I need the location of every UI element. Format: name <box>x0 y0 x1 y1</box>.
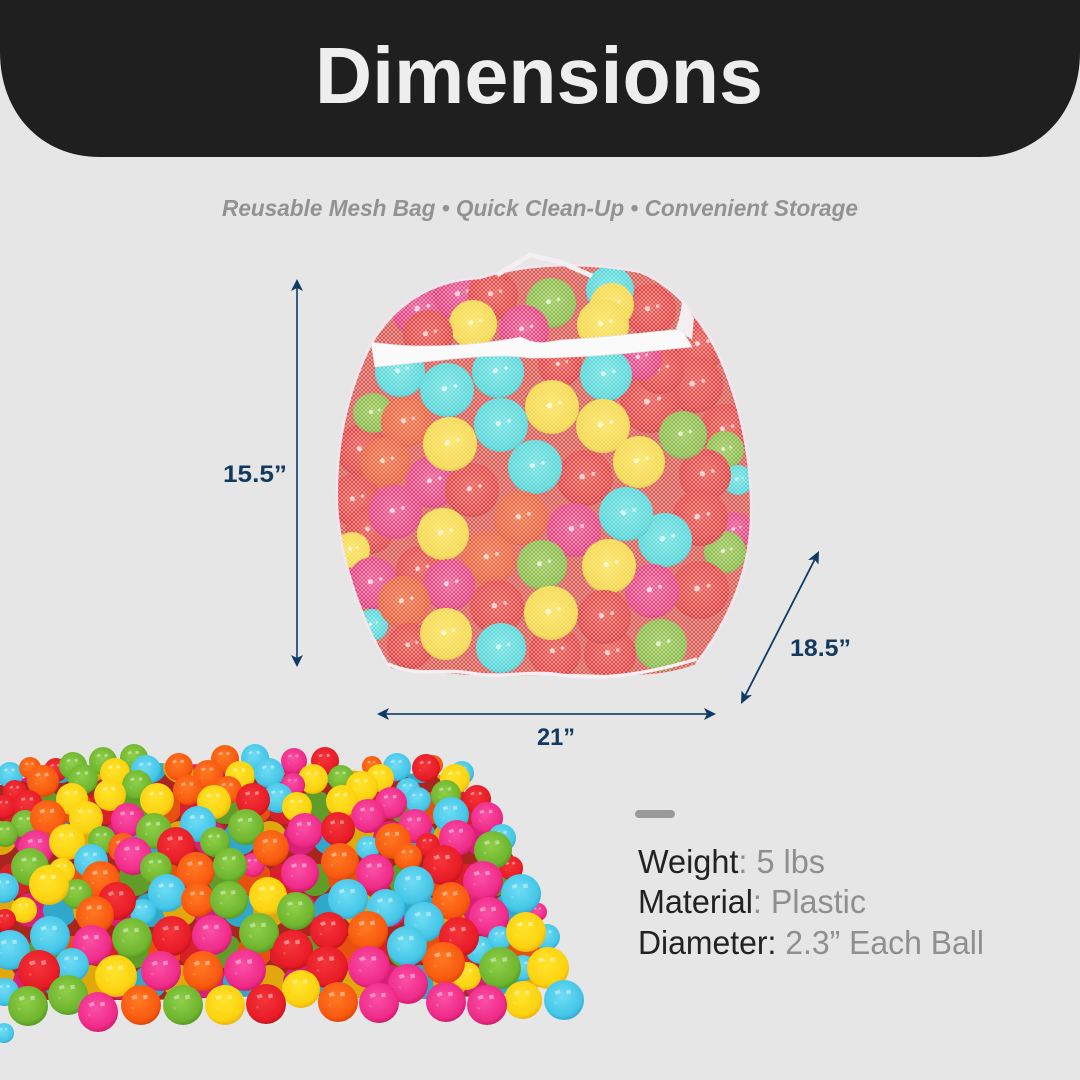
arrow: depth <box>741 551 819 704</box>
bag handle <box>497 255 592 276</box>
title: Dimensions <box>315 31 763 120</box>
bag outline <box>337 265 751 668</box>
spec: weight: Weight: 5 lbs <box>638 843 825 880</box>
accent dash <box>635 810 675 818</box>
label: width: 21” <box>537 724 575 751</box>
zipper band <box>371 329 692 367</box>
spec: diameter: Diameter: 2.3” Each Ball <box>638 924 984 961</box>
zipper corner <box>676 298 694 340</box>
arrow: width <box>377 708 716 720</box>
specifications <box>638 843 984 961</box>
header banner <box>0 0 1080 157</box>
bag contents <box>329 255 760 685</box>
bag bottom hem <box>388 659 697 677</box>
label: height: 15.5” <box>223 461 287 488</box>
subtitle: Reusable Mesh Bag • Quick Clean-Up • Convenient Storage <box>222 195 858 221</box>
pile of balls <box>0 744 584 1043</box>
label: depth: 18.5” <box>790 635 851 662</box>
spec: material: Material: Plastic <box>638 883 866 920</box>
mesh bag of balls <box>329 255 760 685</box>
under-layer of hidden balls <box>0 762 548 1000</box>
arrow: height <box>291 279 303 667</box>
